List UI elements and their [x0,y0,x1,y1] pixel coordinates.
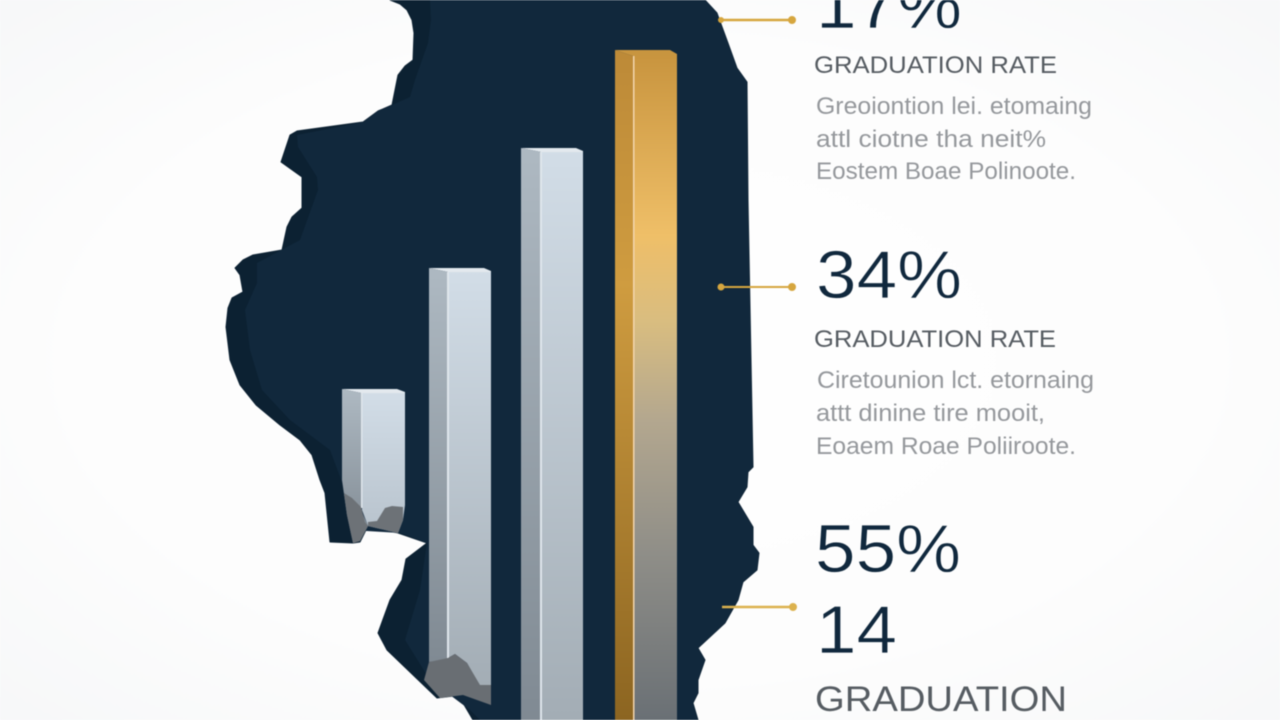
leader line 3 [722,604,796,610]
description [816,93,1092,185]
bar 4 gold [615,50,677,720]
label: GRADUATION RATE [814,326,1056,353]
description: Eoaem Roae Poliiroote. [816,433,1076,460]
state silhouette map [226,0,759,720]
bar chart [342,50,677,720]
description: Eostem Boae Polinoote. [816,158,1076,185]
label: GRADUATION RATE [814,52,1057,79]
description: attt dinine tire mooit, [816,400,1045,427]
bar 2 silver [424,268,491,705]
leader line 2 [718,284,796,290]
description: Greoiontion lei. etomaing [816,93,1092,120]
value 14: 14 [816,592,897,668]
stat block 2 [814,237,1094,460]
description: Ciretounion lct. etornaing [817,367,1094,394]
label: GRADUATION [815,680,1067,719]
value 55%: 55% [815,511,961,587]
description [816,367,1094,460]
bar 1 silver [342,389,405,543]
bar 3 silver [521,148,583,720]
value 34%: 34% [816,237,962,313]
stat block 1 [814,0,1092,185]
stat block 3 [815,511,1067,719]
description: attl ciotne tha neit% [816,126,1046,153]
leader line 1 [718,16,796,24]
silhouette lit surface [245,0,759,720]
